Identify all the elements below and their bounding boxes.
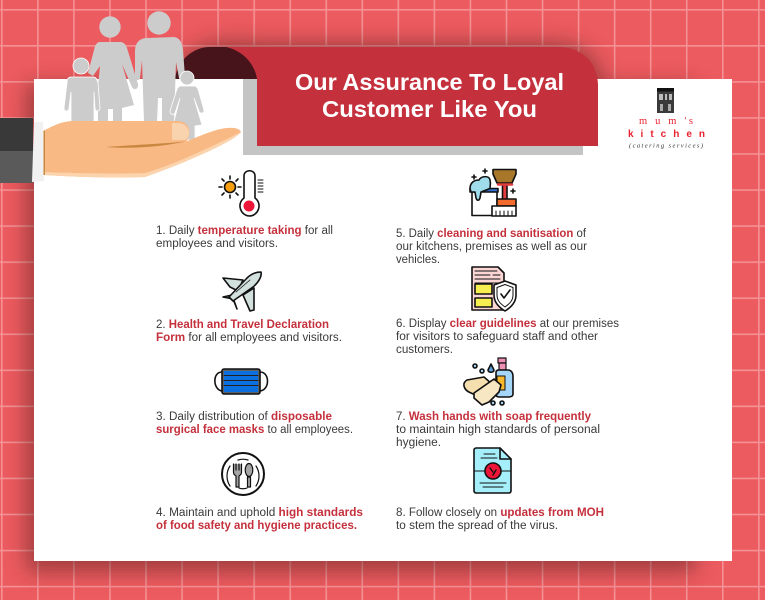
text: item 8: 8. Follow closely on updates from MOH <box>396 507 604 519</box>
text: item 7: 7. Wash hands with soap frequently <box>396 411 592 423</box>
banner back arch <box>175 47 262 79</box>
title banner <box>175 47 598 155</box>
text: to stem the spread of the virus. <box>396 520 558 532</box>
panel shadow <box>26 41 696 572</box>
man <box>135 11 185 122</box>
icon: plate with cutlery <box>222 453 264 495</box>
text: customers. <box>396 344 453 356</box>
text: item 2: 2. Health and Travel Declaration <box>156 319 329 331</box>
palm and fingers <box>45 121 241 177</box>
text: our kitchens, premises as well as our <box>396 241 587 253</box>
girl <box>170 71 204 140</box>
icon: washing hands with soap <box>464 358 513 405</box>
logo <box>628 88 705 150</box>
text: for visitors to safeguard staff and other <box>396 331 598 343</box>
icon: MOH update document <box>474 448 511 493</box>
title: Customer Like You <box>322 96 537 122</box>
logo building <box>657 88 674 113</box>
icon: cleaning bucket and broom <box>470 169 516 216</box>
sleeve <box>0 118 33 183</box>
palm crease <box>106 142 186 148</box>
palm lower highlight <box>45 132 241 177</box>
text: item 1: 1. Daily temperature taking for all <box>156 225 333 237</box>
icon: document and shield <box>472 267 516 311</box>
cuff <box>32 122 44 182</box>
white panel <box>34 79 732 561</box>
logo: (catering services) <box>629 142 703 150</box>
text: of food safety and hygiene practices. <box>156 520 357 532</box>
logo: k i t c h e n <box>628 129 705 140</box>
text: item 3: 3. Daily distribution of disposable <box>156 411 332 423</box>
woman <box>88 16 138 122</box>
title <box>295 69 564 122</box>
family silhouette <box>64 11 204 140</box>
wrist edge <box>44 130 45 175</box>
logo text: m u m 's <box>639 116 693 127</box>
text: item 5: 5. Daily cleaning and sanitisation of <box>396 228 587 240</box>
text: surgical face masks to all employees. <box>156 424 353 436</box>
icon: thermometer and sun <box>219 171 263 216</box>
text: employees and visitors. <box>156 238 278 250</box>
text: to maintain high standards of personal <box>396 424 600 436</box>
text: item 4: 4. Maintain and uphold high standards <box>156 507 363 519</box>
text: Form for all employees and visitors. <box>156 332 342 344</box>
text: item 6: 6. Display clear guidelines at our premises <box>396 318 619 330</box>
banner shadow <box>243 79 583 155</box>
icon: face mask <box>215 369 268 394</box>
icon: airplane <box>223 272 261 311</box>
text: hygiene. <box>396 437 441 449</box>
boy <box>64 58 100 122</box>
title: Our Assurance To Loyal <box>295 69 564 95</box>
text: vehicles. <box>396 254 440 266</box>
thumb nail <box>172 123 189 140</box>
hand with sleeve <box>0 118 241 183</box>
banner shape <box>226 47 598 146</box>
